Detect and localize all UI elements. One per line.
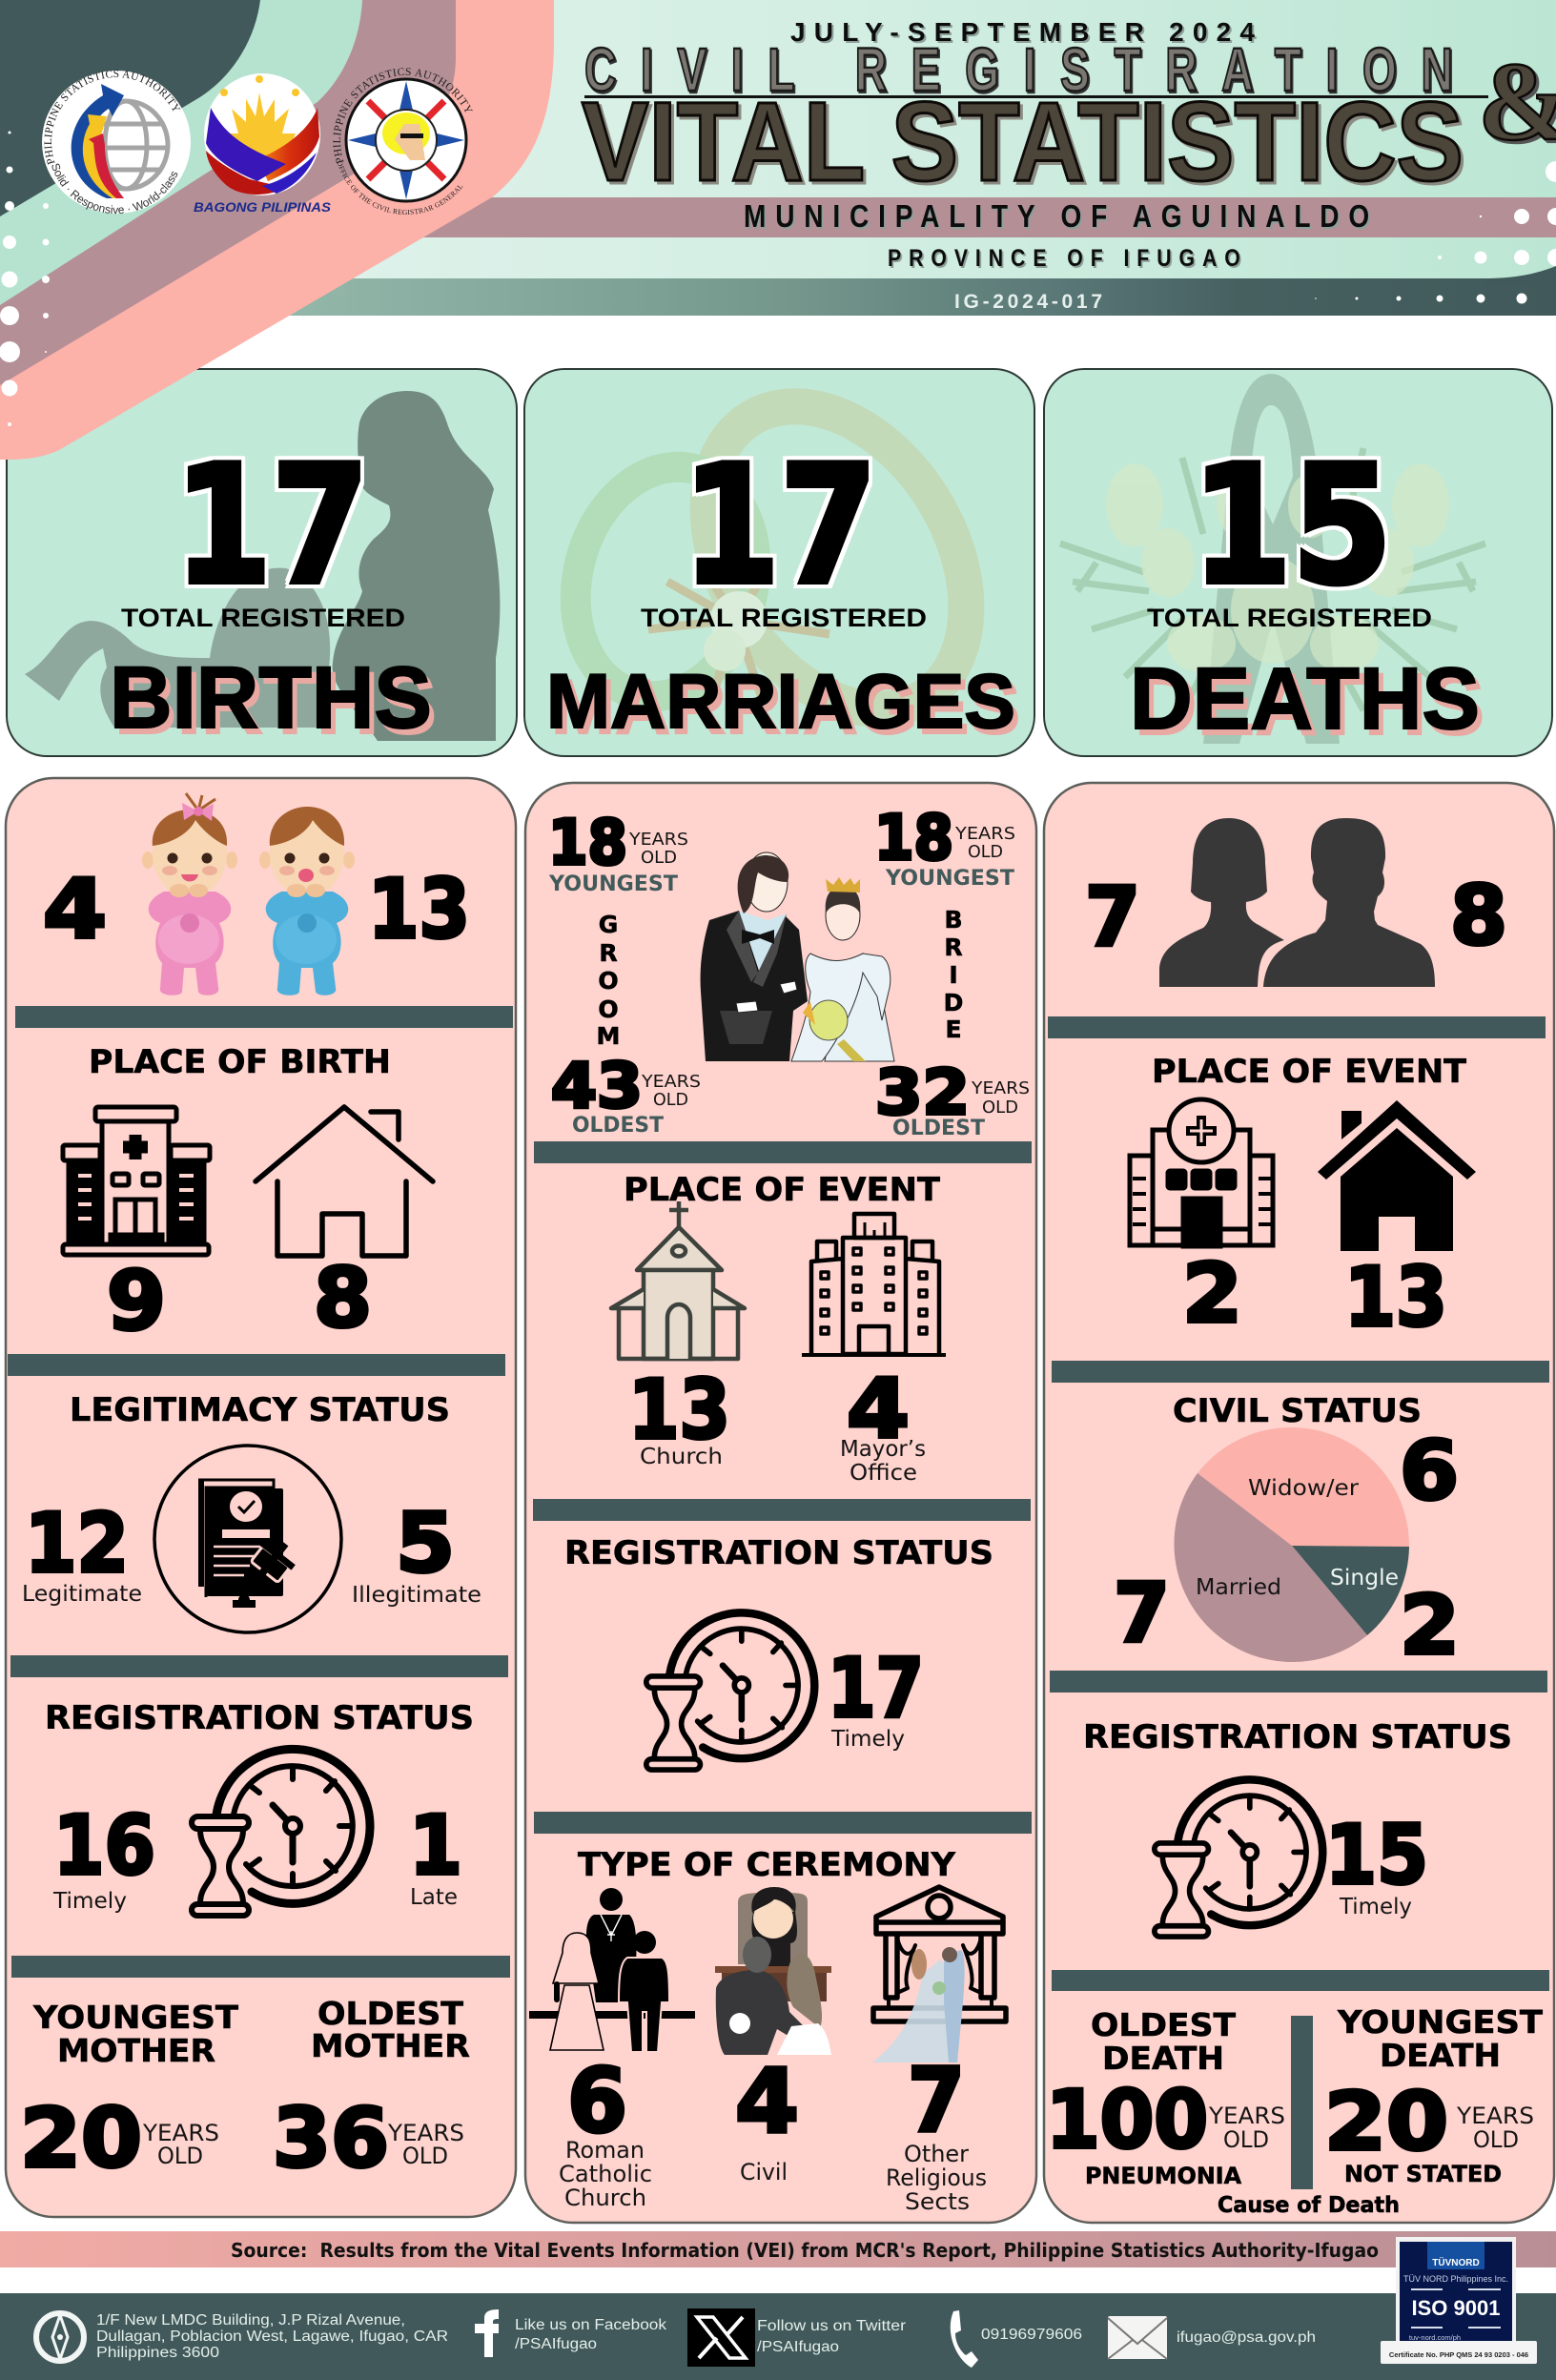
- icon: house: [256, 1107, 433, 1256]
- facebook text: /PSAIfugao: [515, 2336, 597, 2352]
- icon: church: [611, 1201, 745, 1359]
- heading: youngest mother: [32, 1999, 239, 2069]
- label: roman catholic church: Catholic: [559, 2161, 652, 2187]
- heading: oldest mother: [311, 1995, 470, 2064]
- groom youngest age: YOUNGEST: [548, 872, 678, 896]
- heading: registration status: REGISTRATION STATUS: [45, 1699, 474, 1737]
- count: female deaths: 7: [1085, 870, 1140, 965]
- bride youngest age: YOUNGEST: [885, 867, 1014, 891]
- label: other religious sects: Religious: [886, 2165, 987, 2191]
- youngest death age: 20: [1324, 2075, 1448, 2168]
- icon: x: [687, 2308, 755, 2367]
- twitter text: [757, 2318, 906, 2355]
- groom youngest age: 18: [548, 808, 627, 879]
- groom oldest age: [551, 1051, 701, 1138]
- heading: place of event: PLACE OF EVENT: [624, 1171, 941, 1209]
- count: married: 7: [1114, 1566, 1170, 1661]
- bride youngest age: 18: [874, 803, 953, 874]
- oldest death age: YEARS: [1208, 2103, 1285, 2129]
- oldest death age: 100: [1046, 2073, 1208, 2166]
- address: 1/F New LMDC Building, J.P Rizal Avenue,: [96, 2312, 405, 2329]
- youngest mother age: [20, 2091, 219, 2186]
- icon: clock and hourglass: [1155, 1779, 1322, 1937]
- count: timely: 16: [53, 1798, 155, 1894]
- logo: philippine statistics authority: Solid · Responsive · World-class: [51, 164, 177, 214]
- label: timely: Timely: [52, 1889, 127, 1914]
- count: male deaths: 8: [1450, 869, 1507, 964]
- heading: registration status: REGISTRATION STATUS: [1083, 1718, 1512, 1756]
- email: ifugao@psa.gov.ph: [1177, 2329, 1316, 2346]
- logo: office of the civil registrar general: [334, 68, 473, 215]
- icon: clock and hourglass: [192, 1749, 370, 1916]
- oldest mother age: [273, 2091, 464, 2186]
- icon: facebook: [475, 2309, 499, 2357]
- count: hospital: 9: [107, 1254, 166, 1349]
- sex: male count: 13: [368, 862, 470, 957]
- address: Philippines 3600: [96, 2345, 219, 2361]
- label: roman catholic church: [559, 2137, 652, 2211]
- oldest mother age: OLD: [402, 2143, 448, 2169]
- logo caption: BAGONG PILIPINAS: [194, 199, 332, 215]
- groom youngest age: OLD: [641, 848, 677, 868]
- background: ribbon and floral wreath: [1060, 374, 1485, 744]
- logo: philippine statistics authority: PHILIPPINE STATISTICS AUTHORITY: [44, 70, 181, 165]
- icon: house: [1318, 1100, 1476, 1251]
- reference number: IG-2024-017: [954, 291, 1102, 313]
- label: timely: Timely: [1339, 1895, 1412, 1919]
- icon: other religious ceremony: [872, 1887, 1006, 2062]
- heading: oldest mother: MOTHER: [311, 2027, 470, 2064]
- count: roman catholic: 6: [567, 2049, 627, 2152]
- heading: type of ceremony: TYPE OF CEREMONY: [578, 1846, 955, 1884]
- header background: [0, 0, 1556, 316]
- facebook text: [515, 2317, 666, 2352]
- count: timely: 17: [828, 1641, 924, 1736]
- count: church: 13: [628, 1363, 730, 1458]
- count: mayor's office: 4: [847, 1362, 910, 1457]
- diagonal header bands: [0, 0, 554, 460]
- label: timely: Timely: [830, 1727, 905, 1752]
- icon: hospital: [1130, 1099, 1273, 1246]
- groom oldest age: OLDEST: [572, 1114, 664, 1138]
- icon: roman catholic ceremony: [529, 1888, 695, 2052]
- count: legitimate: 12: [25, 1496, 129, 1591]
- count: single: 2: [1400, 1578, 1460, 1673]
- heading: births: BIRTHS: [110, 649, 432, 747]
- label: mayor's office: [840, 1437, 926, 1486]
- bride oldest age: OLDEST: [892, 1117, 985, 1140]
- vertical label: bride: R: [944, 934, 963, 961]
- oldest death age: OLD: [1223, 2126, 1269, 2153]
- heading: youngest mother: MOTHER: [57, 2032, 215, 2069]
- icon: municipal building: [802, 1214, 946, 1355]
- bride oldest age: YEARS: [971, 1078, 1030, 1098]
- count: civil: 4: [735, 2050, 799, 2153]
- badge: iso 9001 certification: [1381, 2237, 1537, 2364]
- twitter text: Follow us on Twitter: [757, 2318, 906, 2334]
- number 15: 15: [1192, 431, 1392, 621]
- heading: youngest death: YOUNGEST: [1337, 2003, 1544, 2041]
- logo: philippine statistics authority: [42, 70, 191, 214]
- footer: [0, 2293, 1556, 2380]
- bride youngest age: [874, 803, 1015, 891]
- label: total registered: TOTAL REGISTERED: [121, 604, 405, 632]
- vertical label: groom: [597, 911, 620, 1050]
- icon: legal document in circle: [154, 1446, 341, 1632]
- heading: deaths: DEATHS: [1130, 650, 1480, 748]
- silhouette: mother and baby: [25, 391, 500, 741]
- badge: iso 9001 certification: TÜV NORD Philippines Inc.: [1403, 2274, 1508, 2284]
- count: hospital: 2: [1182, 1246, 1242, 1342]
- youngest mother age: 20: [20, 2091, 142, 2186]
- label: total registered: TOTAL REGISTERED: [641, 604, 927, 632]
- vertical label: bride: D: [944, 989, 963, 1016]
- groom oldest age: OLD: [653, 1090, 688, 1110]
- icon: baby girl: [142, 793, 237, 995]
- heading: civil status: CIVIL STATUS: [1173, 1392, 1422, 1430]
- panel: births details: [6, 778, 516, 2217]
- vertical label: groom: M: [597, 1022, 620, 1050]
- icon: phone: [951, 2310, 978, 2368]
- vertical label: bride: [944, 906, 963, 1043]
- municipality: MUNICIPALITY OF AGUINALDO: [744, 199, 1369, 235]
- count: widow: 6: [1400, 1424, 1459, 1519]
- panel: deaths total card: [1044, 369, 1552, 756]
- title line: civil registration: CIVIL REGISTRATION: [584, 36, 1453, 104]
- vertical label: bride: I: [949, 961, 958, 989]
- divider: [1291, 2016, 1313, 2189]
- vertical label: bride: B: [944, 906, 963, 934]
- count: timely: 15: [1325, 1808, 1428, 1903]
- source text: Source: Results from the Vital Events Information (VEI) from MCR's Report, Philippine Statistics Authority-Ifugao: [231, 2239, 1379, 2262]
- icon: clock and hourglass: [646, 1612, 814, 1770]
- icon: civil ceremony: [715, 1887, 831, 2055]
- badge: iso 9001 certification: tuv-nord.com/ph: [1409, 2333, 1461, 2342]
- count: home: 13: [1344, 1250, 1447, 1345]
- logo: bagong pilipinas: [194, 73, 332, 215]
- bride youngest age: OLD: [968, 842, 1003, 862]
- badge: iso 9001 certification: Certificate No. PHP QMS 24 93 0203 - 046: [1389, 2350, 1528, 2359]
- pie chart: civil status: Widow/er: [1248, 1476, 1360, 1501]
- vertical label: groom: O: [598, 967, 619, 995]
- address: Dullagan, Poblacion West, Lagawe, Ifugao, CAR: [96, 2329, 448, 2345]
- badge: iso 9001 certification: ISO 9001: [1412, 2296, 1500, 2320]
- heading: youngest death: DEATH: [1380, 2037, 1501, 2074]
- sex: female count: 4: [43, 862, 107, 957]
- logo: office of the civil registrar general: OFFICE OF THE CIVIL REGISTRAR GENERAL: [338, 162, 463, 215]
- decorative dots: [0, 132, 1556, 426]
- oldest mother age: 36: [273, 2091, 389, 2186]
- pie chart: civil status: Single: [1330, 1566, 1399, 1590]
- period: JULY-SEPTEMBER 2024: [790, 17, 1255, 47]
- label: total registered: TOTAL REGISTERED: [1147, 604, 1432, 632]
- icon: female and male silhouettes: [1159, 818, 1435, 987]
- heading: registration status: REGISTRATION STATUS: [564, 1534, 993, 1572]
- oldest death age: [1046, 2073, 1285, 2166]
- vertical label: groom: G: [599, 911, 618, 938]
- oldest cause of death: PNEUMONIA: [1085, 2163, 1241, 2189]
- facebook text: Like us on Facebook: [515, 2317, 666, 2333]
- heading: oldest death: [1091, 2006, 1237, 2077]
- youngest mother age: YEARS: [142, 2120, 219, 2146]
- bride oldest age: [875, 1057, 1030, 1140]
- vertical label: groom: R: [599, 939, 618, 967]
- count: other religious sects: 7: [908, 2049, 965, 2152]
- label: roman catholic church: Roman: [565, 2137, 645, 2164]
- label: other religious sects: [886, 2141, 987, 2215]
- label: late: Late: [410, 1885, 458, 1910]
- label: mayor's office: Office: [850, 1461, 917, 1486]
- label: cause of death: Cause of Death: [1218, 2193, 1400, 2218]
- panel: deaths details: [1044, 783, 1554, 2223]
- count: late: 1: [409, 1798, 462, 1894]
- icon: mail: [1108, 2316, 1167, 2359]
- groom oldest age: 43: [551, 1051, 643, 1122]
- youngest death age: YEARS: [1456, 2103, 1534, 2129]
- pie chart: civil status: Married: [1196, 1575, 1281, 1600]
- label: mayor's office: Mayor’s: [840, 1437, 926, 1462]
- label: civil: Civil: [740, 2159, 788, 2185]
- badge: iso 9001 certification: TÜVNORD: [1432, 2256, 1480, 2268]
- groom youngest age: YEARS: [628, 830, 688, 850]
- heading: marriages: MARRIAGES: [546, 659, 1015, 745]
- vertical label: bride: E: [945, 1016, 962, 1043]
- illustration: bride and groom: [701, 852, 894, 1061]
- groom oldest age: YEARS: [641, 1072, 701, 1092]
- panel: marriages details: [525, 783, 1036, 2223]
- label: church: Church: [640, 1445, 723, 1469]
- label: illegitimate: Illegitimate: [352, 1583, 481, 1608]
- label: other religious sects: Other: [904, 2141, 969, 2167]
- groom youngest age: [548, 808, 688, 896]
- heading: place of event: PLACE OF EVENT: [1152, 1053, 1467, 1091]
- pie chart: civil status: [1174, 1427, 1409, 1662]
- label: other religious sects: Sects: [905, 2188, 970, 2215]
- youngest cause of death: NOT STATED: [1344, 2161, 1502, 2187]
- label: legitimate: Legitimate: [22, 1582, 142, 1607]
- heading: youngest mother: YOUNGEST: [32, 1999, 239, 2036]
- icon: baby boy: [259, 807, 355, 995]
- heading: place of birth: PLACE OF BIRTH: [89, 1043, 391, 1081]
- heading: oldest death: DEATH: [1102, 2040, 1224, 2077]
- heading: youngest death: [1337, 2003, 1544, 2074]
- count: illegitimate: 5: [396, 1496, 455, 1591]
- icon: compass: [36, 2313, 84, 2361]
- youngest death age: [1324, 2075, 1534, 2168]
- source bar: [0, 2231, 1556, 2267]
- panel: marriages total card: [524, 359, 1034, 756]
- vertical label: groom: O: [598, 995, 619, 1023]
- heading: legitimacy status: LEGITIMACY STATUS: [70, 1391, 450, 1429]
- bride youngest age: YEARS: [954, 824, 1015, 844]
- logo: office of the civil registrar general: PHILIPPINE STATISTICS AUTHORITY: [334, 68, 473, 164]
- background: wedding rings and bouquet: [551, 359, 1019, 756]
- number 17: 17: [174, 431, 369, 621]
- youngest death age: OLD: [1473, 2126, 1519, 2153]
- title block: [582, 17, 1556, 313]
- youngest mother age: OLD: [157, 2143, 203, 2169]
- phone number: 09196979606: [981, 2327, 1082, 2343]
- heading: oldest mother: OLDEST: [317, 1995, 464, 2032]
- label: roman catholic church: Church: [564, 2185, 646, 2211]
- title line: vital statistics: VITAL STATISTICS: [582, 79, 1464, 205]
- heading: oldest death: OLDEST: [1091, 2006, 1237, 2043]
- twitter text: /PSAIfugao: [757, 2339, 839, 2355]
- address: [96, 2312, 448, 2361]
- oldest mother age: YEARS: [387, 2120, 464, 2146]
- count: home: 8: [314, 1251, 372, 1346]
- panel: births total card: [7, 369, 517, 756]
- icon: hospital: [63, 1107, 210, 1255]
- bride oldest age: OLD: [982, 1098, 1018, 1118]
- province: PROVINCE OF IFUGAO: [888, 244, 1240, 271]
- bride oldest age: 32: [875, 1057, 970, 1129]
- number 17: 17: [683, 431, 877, 621]
